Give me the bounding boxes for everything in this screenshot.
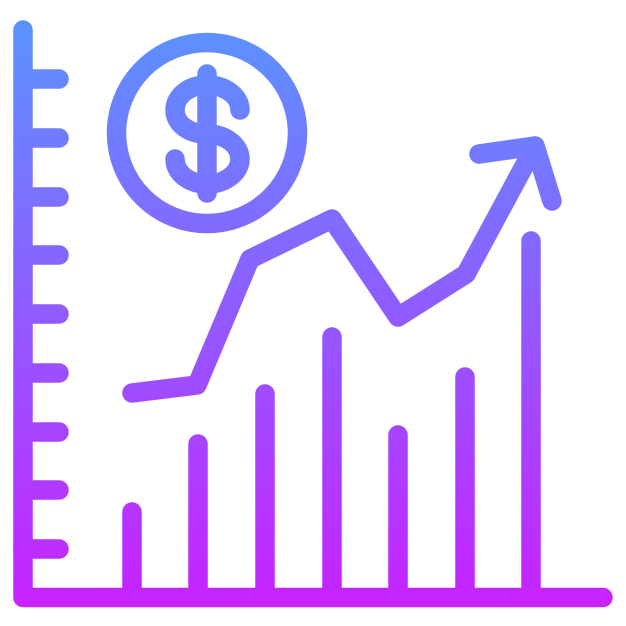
icon: dollar coin [116,42,298,224]
trend line with arrow [132,146,552,393]
bar chart [132,241,531,592]
axis tick marks [23,79,59,549]
